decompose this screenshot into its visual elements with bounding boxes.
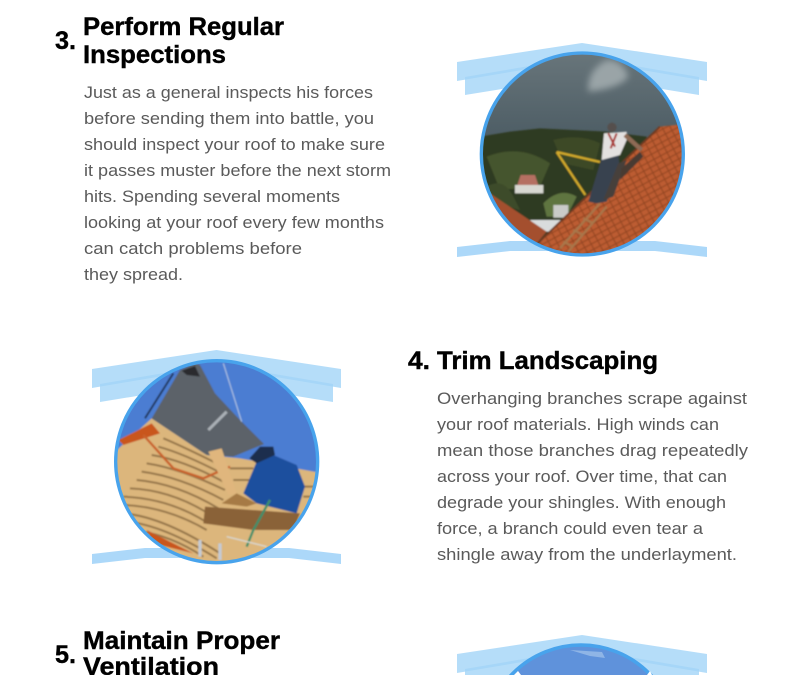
section 4 body text: across your roof. Over time, that can [437,468,727,486]
section 5 heading [55,627,280,675]
section 4 body text: Overhanging branches scrape against [437,390,747,408]
section 3 body text: hits. Spending several moments [84,188,340,206]
section 4 body text: force, a branch could even tear a [437,520,704,538]
section 3 body text: they spread. [84,266,183,284]
section 4 heading: 4. [408,347,430,375]
section 3 body text [84,84,391,284]
section 3 heading: Perform Regular [83,13,284,41]
section 5 heading: Maintain Proper [83,627,280,655]
roof icon with photo: roofer inspecting tiles [457,43,707,263]
section 4 heading: Trim Landscaping [437,347,658,375]
roof icon with photo: cropped sky [457,635,707,675]
roof icon with photo: roofer laying wood battens [92,350,341,570]
section 3 body text: it passes muster before the next storm [84,162,391,180]
section 3 heading [55,13,284,69]
section 3 heading: Inspections [83,41,226,69]
section 3 body text: looking at your roof every few months [84,214,384,232]
section 5 heading: 5. [55,641,76,669]
section 4 body text [437,390,749,564]
section 3 body text: can catch problems before [84,240,302,258]
section 4 body text: mean those branches drag repeatedly [437,442,749,460]
section 3 body text: should inspect your roof to make sure [84,136,385,154]
section 4 body text: degrade your shingles. With enough [437,494,726,512]
section 4 body text: shingle away from the underlayment. [437,546,737,564]
section 4 body text: your roof materials. High winds can [437,416,719,434]
section 3 heading: 3. [55,27,76,55]
section 3 body text: before sending them into battle, you [84,110,374,128]
section 3 body text: Just as a general inspects his forces [84,84,373,102]
